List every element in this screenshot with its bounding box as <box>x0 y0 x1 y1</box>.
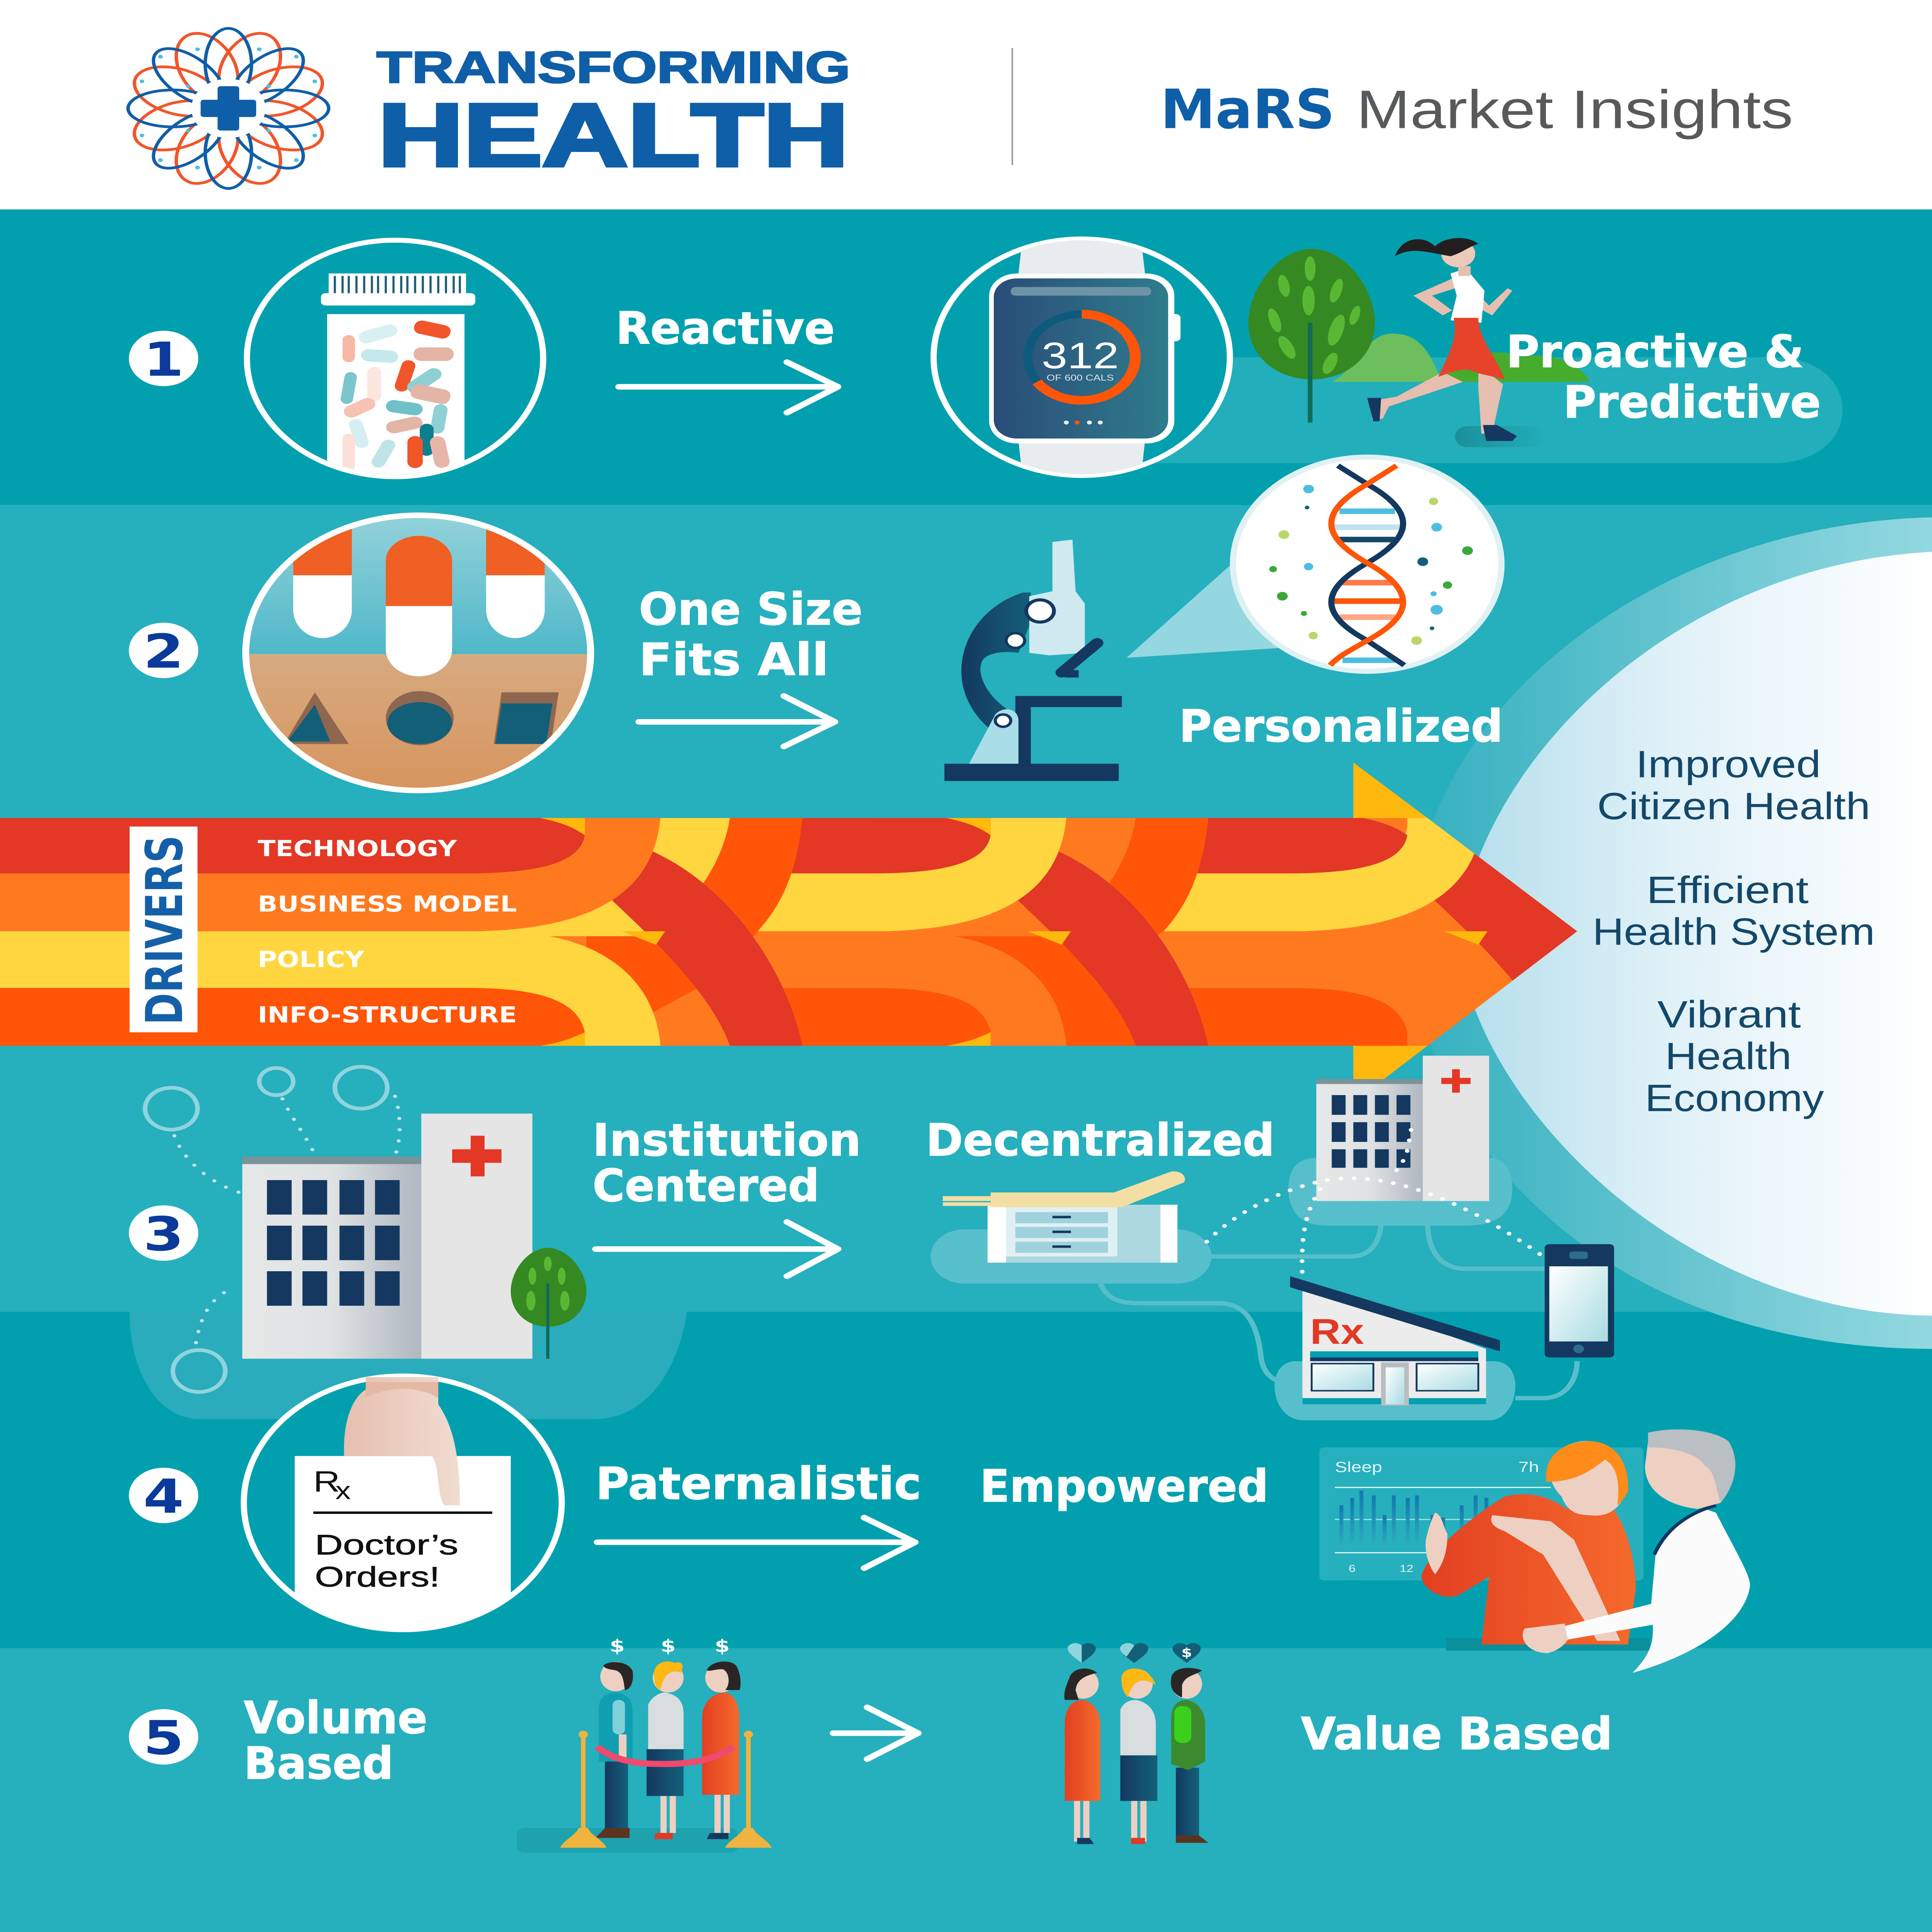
driver labels <box>258 836 517 1028</box>
icon: tree <box>1248 249 1375 422</box>
brand: MaRS: MaRS <box>1160 78 1335 141</box>
heading: Proactive and Predictive: Predictive <box>1563 376 1821 428</box>
icon: smartwatch in circle: OF 600 CALS <box>1047 373 1114 383</box>
heading: Institution Centered: Institution <box>593 1114 861 1166</box>
heading: Paternalistic: Paternalistic <box>596 1458 921 1510</box>
icon: small tree <box>511 1248 587 1359</box>
panel: sleep chart: 12 <box>1400 1563 1413 1574</box>
panel: sleep chart: Sleep <box>1335 1459 1382 1475</box>
illustration: queue with stanchions: $ <box>715 1636 730 1656</box>
heading: Volume Based: Based <box>244 1738 393 1789</box>
icon: exam table <box>943 1171 1185 1263</box>
outcomes text <box>1592 743 1875 1119</box>
backdrop: hospital pill <box>129 1312 687 1419</box>
arrowhead gold backing <box>1353 762 1427 1102</box>
driver labels: TECHNOLOGY <box>258 836 457 862</box>
heading: Proactive and Predictive: Proactive & <box>1506 326 1804 378</box>
arrow: row 4 <box>597 1518 915 1568</box>
runner shadow <box>1455 426 1548 447</box>
heading: One Size Fits All: Fits All <box>639 634 829 685</box>
arrow: row 1 <box>619 362 838 413</box>
panel: sleep chart: 7h <box>1519 1459 1539 1475</box>
brand: Market Insights: Market Insights <box>1356 79 1793 140</box>
icon: smartphone <box>1545 1244 1614 1357</box>
band: rows 2 and 3 <box>0 505 1932 1313</box>
illustration: group with hearts: $ <box>1181 1645 1192 1660</box>
illustration: runner <box>1367 238 1517 441</box>
icon: microscope <box>944 539 1122 781</box>
icon: smartwatch in circle <box>934 234 1230 483</box>
callout wedge <box>1126 564 1281 658</box>
panel: runner backdrop pill <box>1142 357 1842 463</box>
pad: exam table <box>930 1230 1211 1284</box>
header background <box>0 0 1932 211</box>
arrow: row 5 <box>833 1708 918 1759</box>
icon: pharmacy: Rx <box>1310 1312 1364 1352</box>
driver labels: POLICY <box>258 947 364 973</box>
driver labels: INFO-STRUCTURE <box>258 1002 517 1028</box>
outcomes text: Health System <box>1592 910 1875 953</box>
icon: prescription note in circle: Orders! <box>315 1561 440 1593</box>
drivers ribbon arrow <box>0 818 1687 1046</box>
outcomes text: Efficient <box>1646 869 1809 911</box>
number badge 4: 4 <box>143 1470 184 1524</box>
panel: sleep chart: 6 <box>1349 1563 1355 1574</box>
number badge 2: 2 <box>143 625 184 679</box>
number badge 1 <box>129 331 198 387</box>
title: transforming: TRANSFORMING <box>376 42 850 92</box>
panel: sleep chart <box>1320 1447 1643 1580</box>
pad: small hospital <box>1289 1158 1512 1226</box>
icon: prescription note in circle: x <box>335 1477 351 1505</box>
number badge 5: 5 <box>143 1711 184 1765</box>
band: row 1 <box>0 209 1932 506</box>
heading: Institution Centered: Centered <box>593 1160 820 1212</box>
heading: One Size Fits All: One Size <box>639 583 862 635</box>
heading: Empowered: Empowered <box>980 1460 1269 1512</box>
heading: Proactive and Predictive <box>1506 326 1821 428</box>
rings and dotted links <box>145 1067 400 1392</box>
number badge 3 <box>129 1205 198 1262</box>
icon: prescription note in circle: Doctor’s <box>315 1529 458 1561</box>
outcomes text: Improved <box>1636 743 1821 786</box>
title: health: HEALTH <box>378 85 849 185</box>
outer glow ring <box>1412 517 1932 1349</box>
heading: One Size Fits All <box>639 583 862 685</box>
number badge 4 <box>129 1468 198 1524</box>
number badge 3: 3 <box>143 1208 184 1262</box>
icon: small hospital <box>1316 1056 1489 1201</box>
logo: transforming health emblem <box>125 26 332 191</box>
icon: prescription note in circle: R <box>313 1466 340 1498</box>
outcomes text: Economy <box>1645 1077 1824 1119</box>
icon: pegs and holes circle <box>231 505 602 796</box>
heading: Reactive: Reactive <box>616 303 835 354</box>
illustration: doctor and patient <box>1421 1429 1750 1673</box>
illustration: queue with stanchions: $ <box>661 1636 676 1656</box>
heading: Institution Centered <box>593 1114 861 1212</box>
illustration: group with hearts <box>1065 1643 1208 1844</box>
icon: prescription note in circle <box>244 1376 562 1641</box>
icon: large hospital <box>242 1114 532 1359</box>
icon: pill bottle in circle <box>247 240 543 486</box>
number badge 5 <box>129 1709 198 1765</box>
arrow: row 2 <box>639 696 835 747</box>
heading: Decentralized: Decentralized <box>926 1114 1275 1166</box>
number badge 1: 1 <box>143 333 184 387</box>
number badge 2 <box>129 623 198 679</box>
outcomes text: Citizen Health <box>1597 785 1870 827</box>
heading: Personalized: Personalized <box>1179 700 1503 752</box>
connectors between care sites <box>1100 1219 1577 1398</box>
driver labels: BUSINESS MODEL <box>258 891 517 917</box>
header divider <box>1012 48 1013 165</box>
pad: pharmacy <box>1275 1361 1515 1420</box>
band: row 4 <box>0 1312 1932 1650</box>
illustration: queue with stanchions <box>517 1636 772 1853</box>
glow circle: outcomes <box>1458 552 1932 1316</box>
outcomes text: Vibrant <box>1657 993 1801 1036</box>
icon: bushes <box>1332 333 1589 382</box>
icon: DNA circle <box>1233 457 1502 671</box>
icon: pharmacy <box>1290 1276 1500 1405</box>
heading: Volume Based <box>244 1692 427 1789</box>
illustration: queue with stanchions: $ <box>610 1636 625 1656</box>
heading: Volume Based: Volume <box>244 1692 427 1744</box>
arrow: row 3 <box>596 1222 838 1276</box>
outcomes text: Health <box>1665 1035 1792 1077</box>
band: row 5 <box>0 1648 1932 1932</box>
heading: Value Based: Value Based <box>1301 1708 1612 1760</box>
drivers label: DRIVERS <box>135 835 194 1025</box>
dotted links <box>1207 1127 1543 1279</box>
icon: smartwatch in circle: 312 <box>1042 335 1119 376</box>
